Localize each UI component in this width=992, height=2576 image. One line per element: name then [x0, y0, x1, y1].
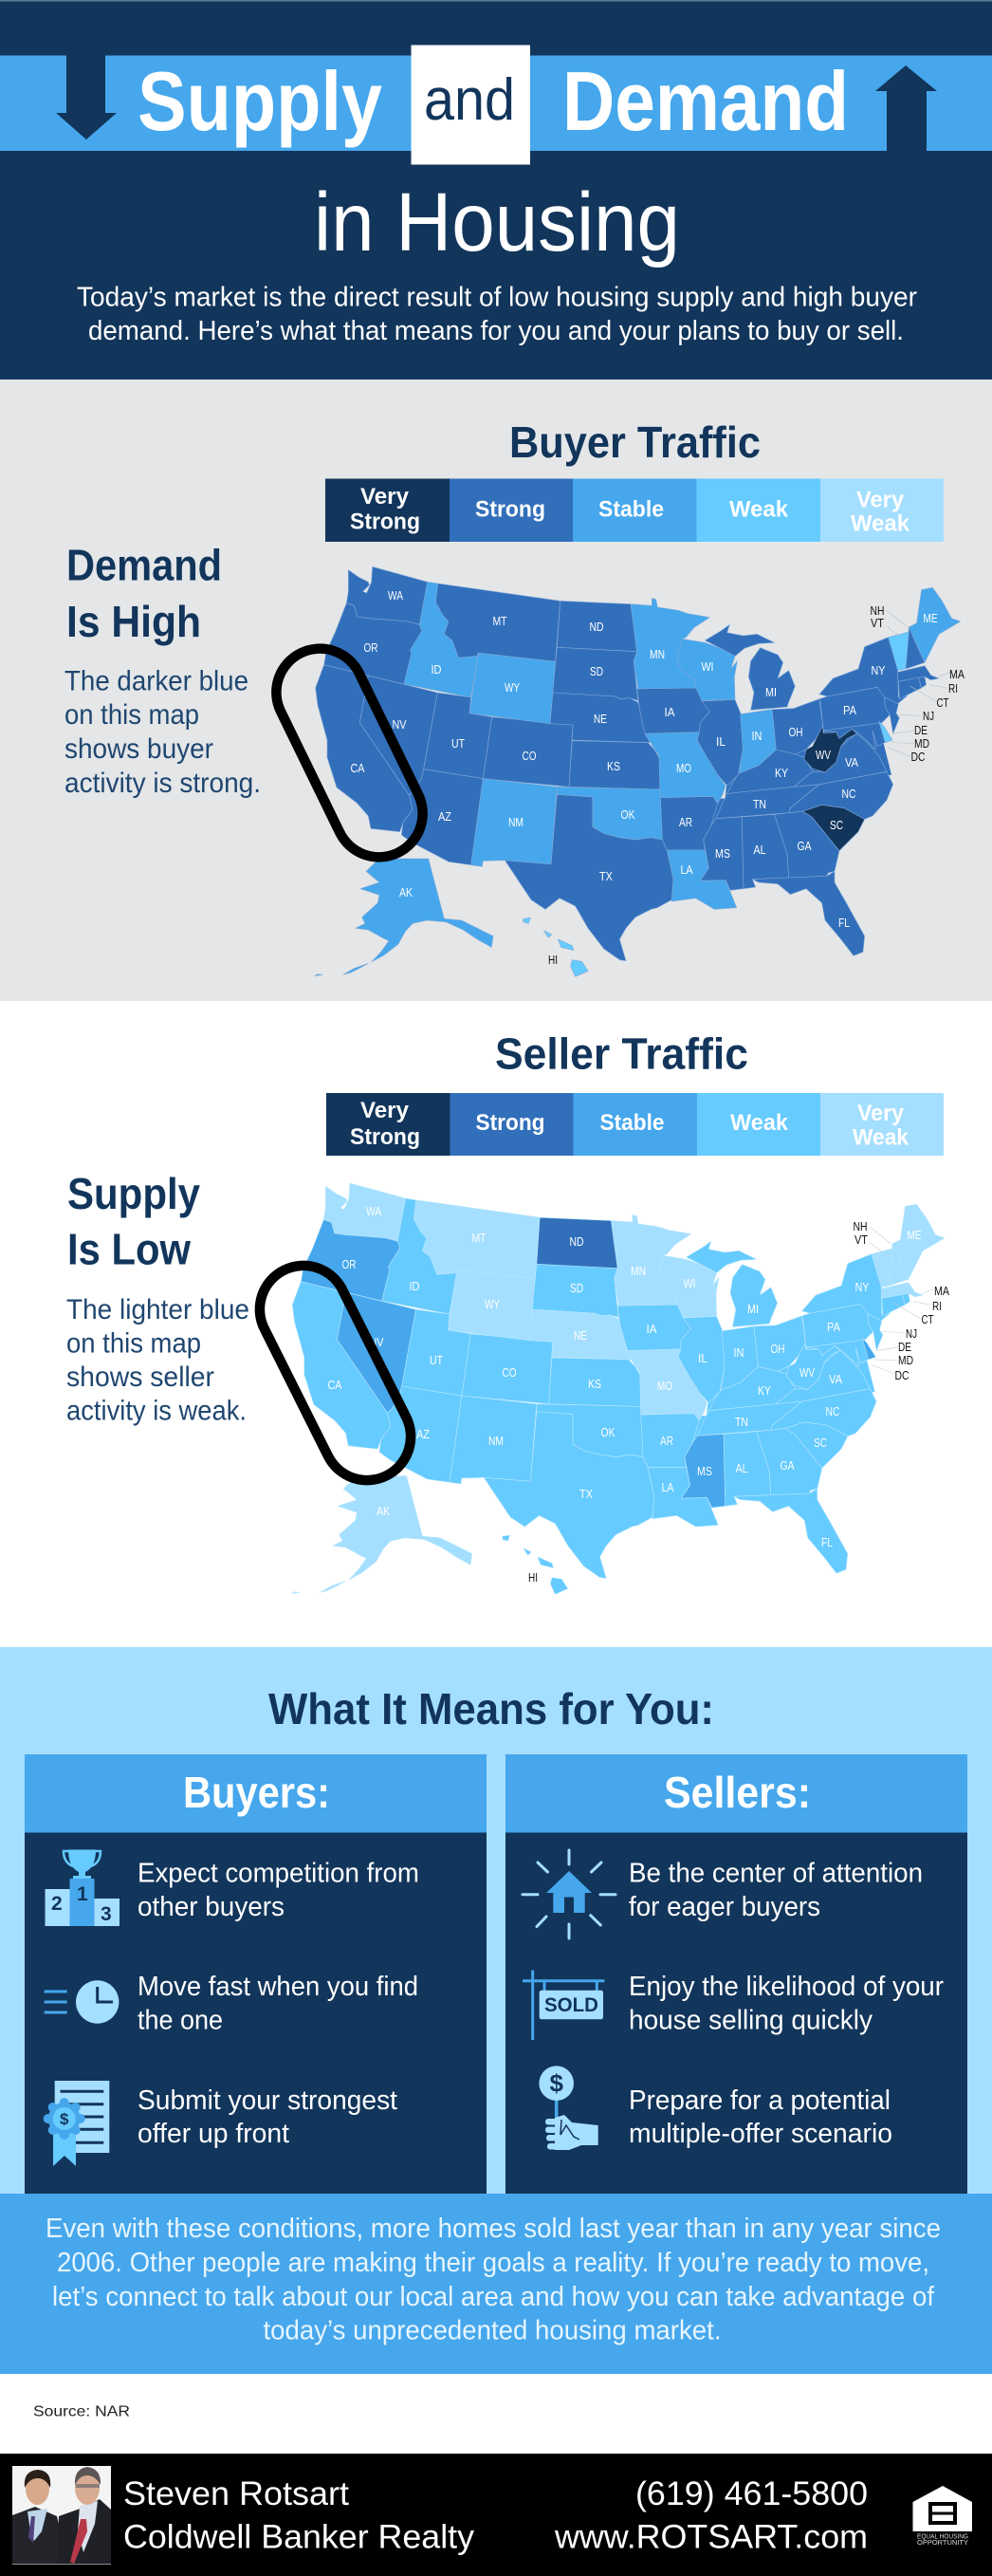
panel: sellers — [505, 1754, 967, 2194]
map: seller traffic: LA — [662, 1480, 674, 1494]
legend: buyer traffic: Weak — [729, 497, 789, 522]
title: in Housing: in Housing — [314, 176, 680, 269]
icon: equal housing opportunity — [912, 2486, 972, 2547]
map: buyer traffic: ND — [590, 620, 603, 634]
legend: seller traffic: Strong — [350, 1124, 420, 1150]
map: seller traffic: MS — [697, 1464, 712, 1478]
map: seller traffic: TX — [579, 1487, 593, 1501]
map: buyer traffic — [315, 566, 964, 976]
map: buyer traffic: OH — [789, 725, 802, 739]
map: seller traffic: NC — [825, 1404, 840, 1418]
map: seller traffic: OR — [341, 1257, 357, 1271]
map: seller traffic: RI — [932, 1299, 942, 1313]
legend: seller traffic: Strong — [476, 1110, 544, 1136]
text: supply explanation: on this map — [66, 1328, 201, 1359]
legend: seller traffic: Very — [857, 1101, 905, 1126]
map: seller traffic: AK — [377, 1504, 390, 1518]
map: seller traffic: MI — [747, 1302, 759, 1316]
map: buyer traffic: GA — [797, 839, 812, 853]
title: Demand: Demand — [562, 54, 849, 148]
panel: buyer traffic / demand — [0, 380, 992, 1001]
map: seller traffic: PA — [827, 1320, 840, 1334]
icon: house with rays — [523, 1850, 615, 1938]
map: seller traffic: MN — [631, 1264, 646, 1278]
map: buyer traffic: AZ — [438, 809, 451, 824]
heading: What It Means for You: What It Means for You: — [268, 1684, 714, 1733]
title: Supply: Supply — [138, 54, 382, 148]
panel: header — [0, 0, 992, 380]
map: seller traffic: WV — [799, 1365, 815, 1380]
map: seller traffic: WY — [485, 1297, 500, 1311]
text: contact details: (619) 461-5800 — [635, 2475, 868, 2512]
map: buyer traffic: NE — [594, 712, 607, 726]
icon: trophy on podium: 1 — [77, 1883, 88, 1905]
map: seller traffic: OH — [770, 1342, 785, 1356]
map: buyer traffic: MT — [493, 614, 507, 628]
map: seller traffic: SC — [814, 1436, 827, 1450]
map: buyer traffic: PA — [843, 703, 856, 717]
text: demand explanation: on this map — [64, 699, 199, 731]
map: seller traffic: AL — [736, 1461, 747, 1475]
map: seller traffic: WI — [683, 1276, 696, 1290]
map: seller traffic: KY — [758, 1383, 771, 1398]
map: buyer traffic: FL — [838, 916, 850, 930]
text: sellers item 1: for eager buyers — [629, 1892, 820, 1922]
map: seller traffic: NJ — [906, 1326, 917, 1341]
map: buyer traffic: MA — [949, 667, 964, 681]
text: buyers item 3: Submit your strongest — [138, 2085, 397, 2116]
icon: equal housing opportunity: OPPORTUNITY — [917, 2540, 968, 2547]
heading: Demand Is High: Demand — [66, 541, 222, 590]
map: buyer traffic: NM — [508, 815, 524, 829]
map: buyer traffic: MO — [676, 761, 691, 775]
panel: closing message — [0, 2194, 992, 2374]
text: sellers item 2: house selling quickly — [629, 2006, 873, 2036]
map: seller traffic: KS — [588, 1377, 601, 1391]
map: seller traffic: NH — [854, 1219, 867, 1233]
icon: up arrow — [875, 65, 937, 151]
text: buyers item 1: Expect competition from — [138, 1858, 419, 1888]
map: buyer traffic: MN — [650, 647, 665, 661]
text: buyers item 2: Move fast when you find — [138, 1972, 418, 2002]
map: buyer traffic: LA — [681, 862, 693, 877]
map: seller traffic: ND — [569, 1234, 584, 1249]
map: seller traffic: GA — [780, 1458, 795, 1473]
legend: buyer traffic — [325, 478, 944, 542]
map: buyer traffic: DC — [910, 750, 926, 764]
icon: equal housing opportunity: EQUAL HOUSING — [917, 2533, 968, 2541]
icon: trophy on podium: 2 — [51, 1893, 63, 1915]
map: buyer traffic: DE — [914, 723, 928, 737]
icon: hand holding dollar paddle — [539, 2066, 598, 2150]
heading: Supply Is Low: Supply — [67, 1169, 200, 1218]
callout: black oval around California — [262, 634, 437, 872]
map: buyer traffic: SC — [830, 818, 843, 832]
map: buyer traffic: MI — [765, 685, 777, 699]
map: seller traffic: MO — [657, 1379, 672, 1393]
legend: buyer traffic: Weak — [851, 510, 910, 537]
map: seller traffic: IA — [647, 1322, 657, 1336]
icon: down arrow — [56, 55, 117, 139]
intro text: Today’s market is the direct result of low housing supply and high buyer — [77, 283, 917, 313]
map: seller traffic: ID — [410, 1279, 419, 1293]
text: demand explanation: activity is strong. — [64, 768, 261, 799]
map: seller traffic: CT — [922, 1312, 934, 1326]
map: buyer traffic: NY — [871, 663, 886, 677]
map: buyer traffic: MD — [914, 736, 929, 751]
text: supply explanation: activity is weak. — [66, 1395, 247, 1427]
panel: seller traffic / supply — [0, 1001, 992, 1647]
map: seller traffic: NV — [370, 1335, 384, 1349]
map: buyer traffic: UT — [451, 736, 465, 751]
map: buyer traffic: KS — [607, 759, 620, 773]
map: buyer traffic: NJ — [923, 709, 934, 723]
icon: offer document with ribbon: $ — [60, 2110, 69, 2128]
intro text: demand. Here’s what that means for you and your plans to buy or sell. — [88, 316, 904, 346]
map: buyer traffic: CA — [351, 761, 365, 775]
map: seller traffic: MT — [472, 1231, 487, 1245]
map: buyer traffic: VT — [871, 616, 884, 630]
map: buyer traffic: NV — [393, 717, 407, 732]
map: seller traffic: NY — [855, 1280, 870, 1294]
legend: seller traffic: Very — [360, 1098, 410, 1123]
map: buyer traffic: RI — [948, 681, 958, 695]
text: sellers item 1 — [629, 1858, 923, 1922]
heading: Demand Is High — [66, 541, 222, 646]
icon: sold sign: SOLD — [544, 1994, 598, 2016]
map: buyer traffic: VA — [845, 755, 858, 769]
map: buyer traffic: CO — [522, 749, 537, 763]
map: buyer traffic: TX — [599, 869, 613, 883]
heading: Supply Is Low — [67, 1169, 200, 1273]
icon: trophy on podium: 3 — [101, 1903, 112, 1925]
icon: trophy on podium — [46, 1850, 119, 1926]
photo: two agents — [12, 2466, 111, 2565]
text: demand explanation — [64, 666, 261, 799]
text: sellers item 3 — [629, 2085, 892, 2149]
text: supply explanation: The lighter blue — [66, 1294, 249, 1325]
text: sellers item 3: Prepare for a potential — [629, 2085, 891, 2116]
map: buyer traffic: NH — [871, 603, 884, 618]
map: seller traffic: MD — [898, 1353, 913, 1367]
map: seller traffic: HI — [528, 1570, 538, 1585]
white box: and — [412, 46, 530, 165]
icon: offer document with ribbon — [44, 2081, 109, 2166]
map: seller traffic: FL — [821, 1535, 833, 1549]
text: contact details: www.ROTSART.com — [554, 2518, 868, 2556]
source note: Source: NAR — [33, 2404, 130, 2419]
map: buyer traffic: SD — [590, 664, 603, 678]
heading: Demand Is High: Is High — [66, 597, 201, 646]
legend: buyer traffic: Strong — [475, 497, 545, 522]
map: seller traffic: VT — [854, 1232, 868, 1247]
map: seller traffic: IL — [698, 1351, 707, 1365]
map: seller traffic: OK — [601, 1425, 615, 1439]
title: and: and — [424, 67, 515, 133]
map: seller traffic: NM — [488, 1434, 504, 1448]
map: buyer traffic: AR — [679, 815, 692, 829]
map: seller traffic: AR — [660, 1434, 673, 1448]
map: buyer traffic: IN — [751, 729, 762, 743]
map: buyer traffic: OK — [620, 807, 635, 822]
text: buyers item 3 — [138, 2085, 397, 2149]
legend: buyer traffic: Very — [360, 484, 410, 510]
map: buyer traffic: AK — [399, 885, 413, 899]
panel: what it means for you — [0, 1647, 992, 2194]
text: buyers item 3: offer up front — [138, 2119, 289, 2149]
map: buyer traffic: WA — [388, 588, 403, 602]
icon: clock with speed lines — [45, 1980, 119, 2024]
text: buyers item 1: other buyers — [138, 1892, 285, 1922]
map: buyer traffic: MS — [715, 846, 730, 861]
heading: Sellers: Sellers: — [664, 1768, 811, 1817]
map: buyer traffic: AL — [753, 843, 766, 857]
text: agent name and brokerage: Steven Rotsart — [123, 2475, 349, 2512]
text: supply explanation — [66, 1294, 249, 1427]
map: buyer traffic: ID — [431, 662, 442, 676]
map: buyer traffic: NC — [842, 787, 855, 801]
legend: seller traffic: Weak — [730, 1110, 789, 1136]
panel: closing message: let’s connect to talk about our local area and how you can take advantage of — [52, 2282, 935, 2312]
legend: buyer traffic: Very — [856, 488, 905, 512]
panel: closing message: Even with these conditions, more homes sold last year than in any year since — [46, 2214, 941, 2244]
map: seller traffic: CA — [328, 1378, 342, 1392]
map: seller traffic: AZ — [416, 1427, 430, 1441]
heading: Buyers: Buyers: — [183, 1768, 330, 1817]
text: buyers item 2 — [138, 1972, 418, 2036]
heading: Seller Traffic: Seller Traffic — [495, 1029, 748, 1078]
panel: closing message: today’s unprecedented housing market. — [264, 2315, 721, 2345]
panel: buyers — [25, 1754, 487, 2194]
text: sellers item 2 — [629, 1972, 944, 2036]
map: buyer traffic: IL — [716, 734, 726, 749]
text: agent name and brokerage — [123, 2475, 475, 2556]
map: buyer traffic: WI — [702, 659, 713, 674]
heading: Buyer Traffic: Buyer Traffic — [509, 417, 761, 467]
icon: hand holding dollar paddle: $ — [549, 2068, 563, 2097]
heading: Supply Is Low: Is Low — [67, 1224, 191, 1273]
map: seller traffic: UT — [430, 1353, 443, 1367]
map: buyer traffic: WV — [816, 748, 831, 762]
legend: seller traffic: Stable — [599, 1110, 664, 1136]
text: supply explanation: shows seller — [66, 1362, 214, 1393]
map: seller traffic: WA — [366, 1204, 381, 1218]
text: sellers item 1: Be the center of attention — [629, 1858, 923, 1888]
map: buyer traffic: KY — [775, 766, 788, 780]
legend: seller traffic — [326, 1093, 944, 1156]
text: sellers item 2: Enjoy the likelihood of your — [629, 1972, 944, 2002]
legend: buyer traffic: Strong — [350, 509, 420, 535]
map: buyer traffic: WY — [505, 680, 520, 695]
icon: sold sign — [523, 1970, 604, 2040]
map: seller traffic: NE — [574, 1328, 587, 1343]
map: buyer traffic: CT — [937, 695, 949, 710]
map: seller traffic: CO — [503, 1365, 516, 1380]
text: demand explanation: The darker blue — [64, 666, 248, 696]
map: seller traffic: MA — [934, 1284, 949, 1298]
map: seller traffic — [291, 1183, 949, 1594]
map: seller traffic: SD — [570, 1281, 583, 1295]
map: seller traffic: VA — [829, 1372, 842, 1386]
map: seller traffic: DE — [898, 1340, 911, 1354]
map: buyer traffic: TN — [753, 797, 766, 811]
text: agent name and brokerage: Coldwell Banker Realty — [123, 2518, 475, 2556]
panel: closing message: 2006. Other people are making their goals a reality. If you’re ready to move, — [57, 2248, 929, 2278]
map: buyer traffic: IA — [664, 705, 675, 719]
map: buyer traffic: ME — [924, 611, 938, 625]
map: buyer traffic: OR — [364, 640, 377, 655]
intro text — [77, 283, 917, 346]
map: seller traffic: ME — [907, 1228, 922, 1242]
text: buyers item 1 — [138, 1858, 419, 1922]
text: sellers item 3: multiple-offer scenario — [629, 2119, 892, 2149]
legend: seller traffic: Weak — [853, 1125, 909, 1150]
title band — [0, 55, 992, 151]
text: demand explanation: shows buyer — [64, 733, 213, 765]
panel: agent footer — [0, 2454, 992, 2576]
text: buyers item 2: the one — [138, 2006, 223, 2036]
text: contact details — [554, 2475, 868, 2556]
map: seller traffic: DC — [895, 1368, 909, 1382]
map: seller traffic: TN — [735, 1415, 748, 1429]
map: seller traffic: IN — [734, 1345, 744, 1360]
legend: buyer traffic: Stable — [598, 497, 664, 522]
map: buyer traffic: HI — [548, 953, 558, 967]
callout: black oval around California and Nevada — [245, 1251, 426, 1495]
